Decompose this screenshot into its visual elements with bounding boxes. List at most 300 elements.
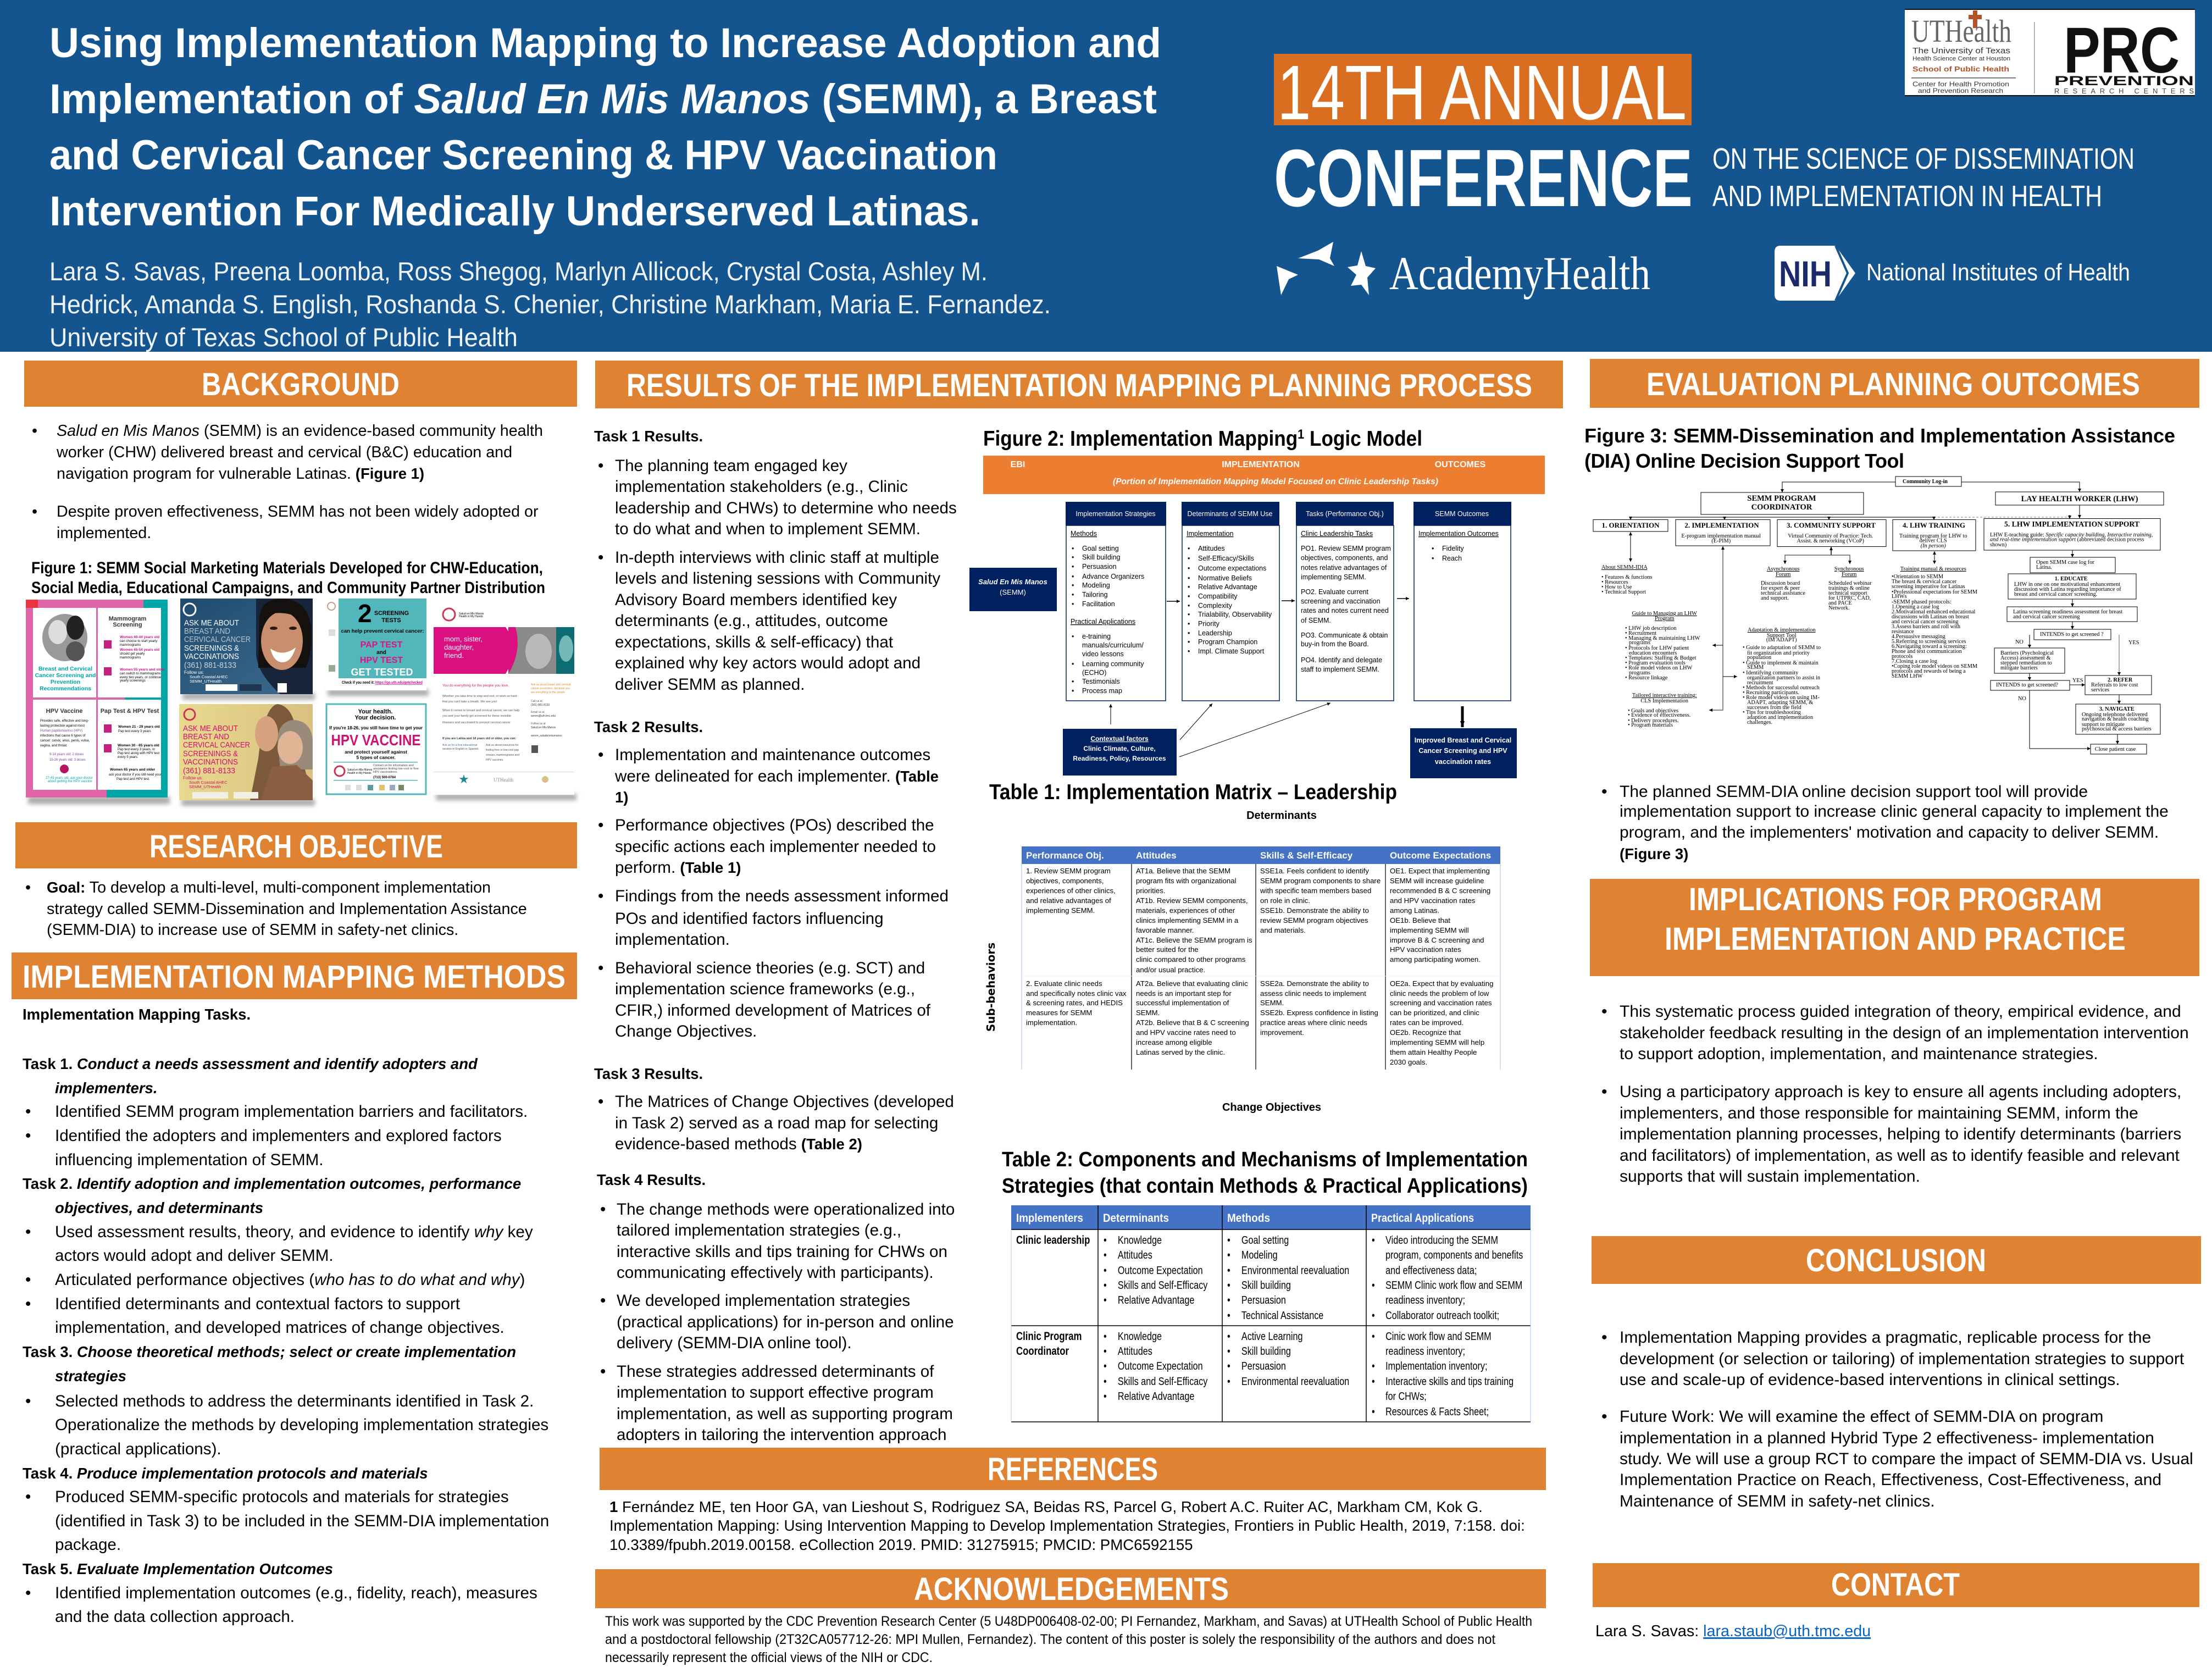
poster: mom sister daughter friend flyer: friend. bbox=[444, 651, 464, 660]
box headings: 5. LHW IMPLEMENTATION SUPPORT bbox=[2004, 520, 2139, 528]
poster: HPV vaccine: Your health. bbox=[358, 708, 392, 715]
table 1 axis label: determinants: Determinants bbox=[1246, 810, 1317, 822]
poster: mom sister daughter friend flyer: Call us at bbox=[531, 700, 542, 703]
poster: screening recommendations: every two years, or continue bbox=[120, 676, 162, 679]
poster title: Intervention For Medically Underserved Latinas. bbox=[49, 188, 980, 235]
poster: HPV vaccine bbox=[326, 704, 426, 794]
flowchart text: Program bbox=[1655, 616, 1674, 622]
figure 3: decision support flowchart: • Role model videos on using IM- bbox=[1743, 695, 1820, 701]
section header: research objective bbox=[15, 822, 577, 868]
poster: screening recommendations: can switch to mammograms bbox=[120, 672, 161, 675]
table 2: components and mechanisms: • bbox=[1227, 1234, 1230, 1246]
table 2: components and mechanisms: Resources & Facts Sheet; bbox=[1385, 1405, 1489, 1417]
logos: UTHealth and PRC: RESEARCH CENTERS bbox=[2054, 87, 2194, 95]
table 2: components and mechanisms: Clinic Program bbox=[1016, 1330, 1082, 1343]
figure 3: decision support flowchart bbox=[1593, 477, 2164, 754]
poster: screening recommendations: Pap test and HPV test. bbox=[117, 778, 150, 781]
section header: implications bbox=[1590, 879, 2199, 976]
background text: Salud en Mis Manos bbox=[57, 422, 199, 440]
table 2: components and mechanisms: • bbox=[1227, 1375, 1230, 1387]
table 1: implementation matrix: experiences of other clinics, bbox=[1026, 887, 1116, 895]
poster: screening recommendations: Women 65 years and older bbox=[110, 768, 156, 772]
table 1: implementation matrix: Latinas served by the clinic. bbox=[1136, 1048, 1225, 1056]
table 2: components and mechanisms: Skill building bbox=[1241, 1345, 1291, 1357]
poster: screening recommendations: HPV Vaccine bbox=[46, 708, 82, 715]
figure 3: decision support flowchart: 4.Persuasive messaging bbox=[1892, 634, 1945, 640]
table 1: implementation matrix: clinics implementing SEMM in a bbox=[1136, 916, 1239, 924]
section header: references bbox=[600, 1448, 1546, 1490]
table 1: implementation matrix: with specific team members based bbox=[1260, 887, 1371, 895]
flowchart text: Close patient case bbox=[2095, 746, 2136, 752]
figure 3: decision support flowchart: 6.Navigating toward a screening: bbox=[1892, 644, 1967, 650]
task results text: • bbox=[598, 549, 603, 567]
table 1: implementation matrix: AT1b. Review SEMM components, bbox=[1136, 896, 1248, 905]
table 1: implementation matrix: Outcome Expectations bbox=[1390, 850, 1491, 861]
task results text: (Table bbox=[895, 768, 939, 785]
table 2: components and mechanisms: • bbox=[1104, 1234, 1107, 1246]
poster: two screening tests: GET TESTED bbox=[351, 667, 413, 678]
flowchart text: Forum bbox=[1776, 572, 1790, 578]
conclusion text: study. We will use a group RCT to compare the impact of SEMM-DIA vs. Usual bbox=[1620, 1450, 2193, 1468]
column: determinants: Impl. Climate Support bbox=[1198, 647, 1265, 655]
table 2: components and mechanisms: Outcome Expectation bbox=[1118, 1264, 1203, 1276]
figure 3: decision support flowchart: • Program evaluation tools bbox=[1625, 660, 1686, 666]
task results text: leadership and CHWs) to determine who needs bbox=[615, 499, 957, 517]
figure 3: decision support flowchart: 7.Closing a case log bbox=[1892, 658, 1937, 664]
flowchart text: Support Tool bbox=[1767, 633, 1797, 639]
poster: screening recommendations: Screening bbox=[113, 622, 142, 628]
figure 3: decision support flowchart: and support. bbox=[1761, 595, 1789, 601]
poster: HPV vaccine: assistance finding low-cost or free bbox=[373, 767, 419, 771]
background text: (SEMM) is an evidence-based community health bbox=[199, 422, 543, 440]
table 1: implementation matrix: AT1a. Believe that the SEMM bbox=[1136, 867, 1230, 875]
flowchart text: (E-PIM) bbox=[1711, 538, 1731, 544]
task results text: were delineated for each implementer. bbox=[614, 767, 895, 785]
table 1: implementation matrix: recommended B & C screening bbox=[1390, 887, 1490, 895]
column: implementation strategies: • bbox=[1072, 573, 1074, 580]
table 2: components and mechanisms: • bbox=[1227, 1330, 1230, 1342]
poster title: Using Implementation Mapping to Increase Adoption and bbox=[49, 20, 1161, 67]
poster: screening recommendations bbox=[26, 600, 170, 804]
reference text: 10.3389/fpubh.2019.00158. eCollection 2019. PMID: 31275915; PMCID: PMC6592155 bbox=[609, 1536, 1193, 1553]
table 1: implementation matrix: materials, experiences of other bbox=[1136, 906, 1235, 915]
table 1: implementation matrix: HPV vaccination rates bbox=[1390, 945, 1461, 954]
poster: mom sister daughter friend flyer: Salud en Mis Manos bbox=[459, 612, 484, 616]
implementation mapping tasks: and the data collection approach. bbox=[55, 1608, 295, 1626]
conclusion text: implementation in a planned Hybrid Type 2 effectiveness- implementation bbox=[1620, 1429, 2154, 1447]
poster: mom sister daughter friend flyer: daughter, bbox=[444, 643, 474, 651]
implementation mapping tasks: • bbox=[25, 1295, 31, 1313]
figure 3: decision support flowchart: successes from the field bbox=[1747, 705, 1801, 711]
task results text: These strategies addressed determinants of bbox=[617, 1363, 934, 1381]
flowchart text: Synchronous bbox=[1834, 566, 1864, 572]
figure 3: decision support flowchart: for UTPRC, CAD, bbox=[1828, 595, 1871, 601]
figure 3: decision support flowchart: • LHW job description bbox=[1625, 625, 1676, 632]
table 2: components and mechanisms: Modeling bbox=[1241, 1249, 1278, 1261]
section header: evaluation planning outcomes bbox=[1590, 359, 2199, 408]
table 2: components and mechanisms: • bbox=[1227, 1279, 1230, 1291]
poster: mom sister daughter friend flyer bbox=[434, 599, 576, 800]
column: determinants: • bbox=[1188, 629, 1190, 637]
table 1: implementation matrix: SEMM. bbox=[1136, 1009, 1160, 1017]
column: implementation strategies: • bbox=[1072, 591, 1074, 599]
poster: screening recommendations: Women 30 - 65 years old bbox=[118, 744, 159, 747]
table 2: components and mechanisms: Skills and Self-Efficacy bbox=[1118, 1375, 1208, 1387]
poster: two screening tests: 2 bbox=[358, 599, 372, 628]
figure 3 heading: Figure 3: SEMM-Dissemination and Implementation Assistance bbox=[1584, 424, 2175, 447]
implementation mapping tasks: Selected methods to address the determinants identified in Task 2. bbox=[55, 1392, 534, 1410]
poster: two screening tests: SCREENING bbox=[374, 610, 409, 617]
box: contextual factors bbox=[1063, 729, 1177, 776]
column: determinants: • bbox=[1188, 574, 1190, 582]
reference text: Fernández ME, ten Hoor GA, van Lieshout S, Rodriguez SA, Beidas RS, Parcel G, Robert A.C. Ruiter AC, Markham CM, Kok G. bbox=[622, 1498, 1483, 1515]
figure 3: decision support flowchart: protocols bbox=[1892, 653, 1912, 660]
task results text: The Matrices of Change Objectives (developed bbox=[615, 1093, 954, 1111]
figure 3: decision support flowchart: (abbreviated decision process bbox=[2077, 536, 2144, 543]
box: EBI: (SEMM) bbox=[1000, 588, 1026, 596]
figure 3: decision support flowchart: Referrals to low cost bbox=[2091, 682, 2138, 688]
column: implementation strategies: e-training bbox=[1082, 633, 1111, 640]
flowchart text: Virtual Community of Practice: Tech. bbox=[1788, 533, 1873, 539]
poster: screening recommendations: lasting protection against most bbox=[40, 724, 85, 728]
implementation mapping tasks: Identify adoption and implementation outcomes, performance bbox=[77, 1175, 521, 1192]
poster: screening recommendations: Pap test every 3 years bbox=[118, 730, 151, 733]
table 1: implementation matrix: practice areas where clinic needs bbox=[1260, 1018, 1367, 1027]
task results text: implementation stakeholders (e.g., Clinic bbox=[615, 478, 908, 496]
implications text: implementation planning processes, helping to identify determinants (barriers bbox=[1620, 1125, 2181, 1143]
implementation mapping tasks: • bbox=[25, 1103, 31, 1121]
figure 3: decision support flowchart: programs bbox=[1629, 670, 1650, 676]
flowchart text: (In person) bbox=[1921, 543, 1946, 549]
table 2: components and mechanisms: Knowledge bbox=[1118, 1234, 1162, 1246]
poster: screening recommendations: can choose to start yearly bbox=[120, 640, 157, 643]
poster: screening recommendations: mammograms bbox=[120, 656, 141, 660]
table 2: components and mechanisms: Knowledge bbox=[1118, 1330, 1162, 1342]
table 1: implementation matrix: priorities. bbox=[1136, 887, 1165, 895]
figure 3 heading: (DIA) Online Decision Support Tool bbox=[1584, 450, 1904, 472]
logos: UTHealth and PRC bbox=[1905, 9, 2195, 96]
table 2: components and mechanisms: Attitudes bbox=[1118, 1345, 1152, 1357]
poster: HPV vaccine: Contact us for information and bbox=[373, 764, 414, 767]
figure 3: decision support flowchart: organization partners to assist in bbox=[1747, 675, 1820, 681]
poster title: Implementation of Salud En Mis Manos (SEMM), a Breast bbox=[49, 76, 1157, 123]
poster: screening recommendations: about getting the HPV vaccine bbox=[48, 780, 92, 783]
task results text: implementation. bbox=[615, 931, 730, 949]
implementation mapping tasks: • bbox=[25, 1488, 31, 1506]
implementation mapping tasks: Identified determinants and contextual factors to support bbox=[55, 1295, 460, 1313]
figure 3: decision support flowchart: Latina. bbox=[2036, 564, 2052, 571]
implementation mapping tasks: Identified SEMM program implementation barriers and facilitators. bbox=[55, 1103, 528, 1121]
implementation mapping tasks: (identified in Task 3) to be included in the SEMM-DIA implementation bbox=[55, 1512, 549, 1530]
implementation mapping tasks: • bbox=[25, 1271, 31, 1289]
table 1: implementation matrix: and HPV vaccination rates bbox=[1390, 896, 1476, 905]
poster: mom sister daughter friend flyer: HPV vaccines. bbox=[486, 758, 504, 762]
table 2: components and mechanisms: • bbox=[1104, 1249, 1107, 1261]
task results text: expectations, skills & self-efficacy) that bbox=[615, 633, 893, 651]
column: implementation strategies: Advance Organizers bbox=[1082, 573, 1144, 580]
poster: HPV vaccine: HPV vaccinations. bbox=[373, 771, 398, 774]
poster: mom sister daughter friend flyer: you and your family get screened for these invisible bbox=[442, 715, 511, 718]
logo: NIH: National Institutes of Health bbox=[1866, 259, 2130, 286]
arrows bbox=[1111, 599, 1462, 757]
figure 3: decision support flowchart: Ongoing telephone delivered bbox=[2082, 712, 2148, 718]
poster: mom sister daughter friend flyer: UTHealth bbox=[494, 777, 513, 783]
column: implementation strategies: manuals/curriculum/ bbox=[1082, 641, 1144, 649]
box: improved screening bbox=[1410, 728, 1517, 778]
column: tasks: Tasks (Performance Obj.) bbox=[1306, 510, 1384, 518]
task results text: in Task 2) served as a road map for selecting bbox=[615, 1114, 938, 1132]
table 2: components and mechanisms: Cinic work flow and SEMM bbox=[1385, 1330, 1492, 1342]
implementation mapping tasks: • bbox=[25, 1392, 31, 1410]
figure 3: decision support flowchart: LHW in one on one motivational enhancement bbox=[2014, 581, 2120, 588]
flowchart text: Training program for LHW to bbox=[1899, 533, 1967, 539]
column: implementation strategies bbox=[1066, 502, 1166, 701]
figure 3: decision support flowchart: services bbox=[2091, 687, 2109, 693]
figure 3: decision support flowchart: and cervical cancer screening bbox=[1892, 619, 1958, 625]
figure 3: decision support flowchart: technical support bbox=[1828, 590, 1867, 596]
task results text: Task 3 Results. bbox=[594, 1065, 703, 1082]
table 2: components and mechanisms: Relative Advantage bbox=[1118, 1390, 1194, 1402]
box headings: LAY HEALTH WORKER (LHW) bbox=[2021, 495, 2138, 503]
background text: navigation program for vulnerable Latinas. bbox=[57, 465, 356, 483]
poster: mom sister daughter friend flyer: Ask us for a free educational bbox=[442, 744, 477, 747]
figure 3: decision support flowchart: • Technical Support bbox=[1601, 589, 1646, 595]
conference banner: AND IMPLEMENTATION IN HEALTH bbox=[1712, 180, 2102, 213]
logos: UTHealth and PRC: Center for Health Promotion bbox=[1912, 80, 2009, 88]
logic model band: EBI bbox=[1011, 460, 1025, 469]
poster: ask me about (tan) bbox=[179, 704, 315, 806]
table 2: components and mechanisms bbox=[1011, 1205, 1531, 1422]
figure 3: decision support flowchart: INTENDS to get screened? bbox=[1996, 682, 2058, 688]
table 1: implementation matrix: SSE1a. Feels confident to identify bbox=[1260, 867, 1369, 875]
task results text: to do what and when to implement SEMM. bbox=[615, 520, 921, 538]
poster: ask me about (tan): SCREENINGS & bbox=[183, 749, 238, 758]
column: determinants: Leadership bbox=[1198, 629, 1232, 637]
logos: UTHealth and PRC: and Prevention Research bbox=[1918, 87, 2003, 95]
header band bbox=[0, 0, 2212, 352]
boxes bbox=[1593, 477, 2164, 754]
task results text: determinants (e.g., attitudes, outcome bbox=[615, 612, 888, 630]
figure 3: decision support flowchart: Latina screening readiness assessment for breast bbox=[2013, 609, 2122, 615]
poster: screening recommendations: vagina, and throat. bbox=[40, 744, 68, 747]
section header: results bbox=[595, 361, 1563, 408]
task results text: Findings from the needs assessment informed bbox=[615, 887, 949, 905]
background text: (Figure 1) bbox=[356, 465, 424, 482]
poster: screening recommendations: 15-26 years old: 3 doses bbox=[49, 758, 86, 762]
poster: ask me about (tan): BREAST AND bbox=[183, 732, 229, 741]
figure 2 heading: Figure 2: Implementation Mapping1 Logic Model bbox=[983, 427, 1422, 451]
poster: screening recommendations: Mammogram bbox=[109, 616, 146, 622]
table 1: implementation matrix: 2. Evaluate clinic needs bbox=[1026, 979, 1102, 988]
table 1: implementation matrix: & screening rates, and HEDIS bbox=[1026, 999, 1123, 1007]
figure 3: decision support flowchart: Open SEMM case log for bbox=[2036, 560, 2094, 566]
figure 3 heading bbox=[1584, 424, 2175, 472]
authors and affiliation: Hedrick, Amanda S. English, Roshanda S. Chenier, Christine Markham, Maria E. Fernandez. bbox=[49, 290, 1051, 319]
figure 3: decision support flowchart: INTENDS to get screened ? bbox=[2040, 632, 2104, 638]
implementation mapping tasks: actors would adopt and deliver SEMM. bbox=[55, 1247, 334, 1265]
poster: screening recommendations: 9-14 years old: 2 doses bbox=[49, 753, 84, 756]
figure 1 caption: Social Media, Educational Campaigns, and Community Partner Distribution bbox=[31, 579, 545, 597]
task results text: The change methods were operationalized into bbox=[617, 1200, 955, 1219]
poster: mom sister daughter friend flyer: ★ bbox=[458, 772, 469, 786]
implications text: to support adoption, implementation, and maintenance strategies. bbox=[1620, 1045, 2098, 1063]
poster: screening recommendations: every 5 years. bbox=[118, 756, 138, 759]
column: implementation strategies: Practical Applications bbox=[1071, 618, 1135, 625]
figure 3: decision support flowchart: • Goals and objectives bbox=[1628, 708, 1678, 714]
figure 3: decision support flowchart: protocols and rewards of being a bbox=[1892, 668, 1966, 674]
poster: ask me about (blue) bbox=[180, 599, 315, 700]
column: tasks: PO3. Communicate & obtain bbox=[1301, 632, 1388, 639]
poster: screening recommendations: Breast and Cervical bbox=[38, 666, 92, 672]
poster: mom sister daughter friend flyer: Whether you take time to stop and rest, or work so hard bbox=[442, 695, 517, 698]
column: implementation strategies: • bbox=[1072, 633, 1074, 640]
task results text: Implementation and maintenance outcomes bbox=[615, 746, 930, 764]
implementation mapping tasks: who has to do what and why) bbox=[314, 1271, 525, 1289]
task results text: We developed implementation strategies bbox=[617, 1292, 910, 1310]
column: determinants: • bbox=[1188, 602, 1190, 610]
table 2: components and mechanisms: • bbox=[1104, 1375, 1107, 1387]
task results text: • bbox=[598, 816, 603, 834]
logos: UTHealth and PRC: UTHealth bbox=[1911, 13, 2011, 49]
table 1 axis label: sub-behaviors: Sub-behaviors bbox=[984, 943, 997, 1032]
column: determinants: • bbox=[1188, 638, 1190, 646]
column: implementation strategies: Implementation Strategies bbox=[1075, 510, 1156, 518]
logos: UTHealth and PRC: PRC bbox=[2064, 14, 2180, 87]
poster: ask me about (tan): SEMM_UTHealth bbox=[189, 784, 221, 789]
column: determinants: • bbox=[1188, 592, 1190, 600]
table 1: implementation matrix: Skills & Self-Efficacy bbox=[1260, 850, 1353, 861]
table 1: implementation matrix: can be prioritized, and clinic bbox=[1390, 1009, 1479, 1017]
table 1: implementation matrix: SSE1b. Demonstrate the ability to bbox=[1260, 906, 1369, 915]
evaluation planning text: The planned SEMM-DIA online decision support tool will provide bbox=[1620, 783, 2088, 801]
evaluation planning text: implementation support to increase clinic general capacity to implement the bbox=[1620, 802, 2169, 821]
box: contextual factors: Readiness, Policy, Resources bbox=[1073, 755, 1166, 762]
figure 3: decision support flowchart: • Evidence of effectiveness. bbox=[1628, 712, 1690, 718]
column: tasks: PO1. Review SEMM program bbox=[1301, 545, 1391, 552]
figure 3: decision support flowchart: breast and cervical cancer screening. bbox=[2014, 591, 2097, 597]
poster: screening recommendations: cancer: cervix, anus, penis, vulva, bbox=[40, 739, 90, 743]
table 2: components and mechanisms: Attitudes bbox=[1118, 1249, 1152, 1261]
flowchart text: Adaptation & implementation bbox=[1748, 627, 1815, 633]
figure 3: decision support flowchart: • Guide to implement & maintain bbox=[1743, 660, 1819, 666]
table 1: implementation matrix: Performance Obj. bbox=[1026, 850, 1104, 861]
figure 3: decision support flowchart: •Orientation to SEMM bbox=[1892, 574, 1943, 580]
research objective text: Goal: bbox=[47, 879, 85, 896]
table 2: components and mechanisms: Determinants bbox=[1103, 1212, 1169, 1225]
table 1: implementation matrix: Attitudes bbox=[1136, 850, 1177, 861]
background text: • bbox=[32, 422, 37, 440]
box headings: SEMM PROGRAM bbox=[1747, 494, 1816, 503]
box headings: 2. IMPLEMENTATION bbox=[1684, 521, 1759, 529]
conclusion text: Future Work: We will examine the effect of SEMM-DIA on program bbox=[1620, 1408, 2103, 1426]
column: determinants: Program Champion bbox=[1198, 638, 1257, 646]
figure 3: decision support flowchart: 5.Referring to screening services bbox=[1892, 639, 1966, 645]
implementation mapping tasks: • bbox=[25, 1584, 31, 1602]
table 1: implementation matrix: favorable manner. bbox=[1136, 926, 1194, 934]
column: tasks: rates and notes current need bbox=[1301, 607, 1389, 614]
implementation mapping tasks: objectives, and determinants bbox=[55, 1199, 263, 1216]
logos: UTHealth and PRC: The University of Texas bbox=[1912, 46, 2010, 56]
implementation mapping tasks: Produced SEMM-specific protocols and materials for strategies bbox=[55, 1488, 509, 1506]
logic model band bbox=[983, 456, 1545, 494]
table 2: components and mechanisms: Coordinator bbox=[1016, 1345, 1069, 1358]
section header: conclusion bbox=[1592, 1236, 2201, 1284]
table 2: components and mechanisms: Collaborator outreach toolkit; bbox=[1385, 1309, 1499, 1321]
column: implementation strategies: Testimonials bbox=[1082, 678, 1120, 685]
column: tasks bbox=[1296, 502, 1394, 701]
implementation mapping tasks: implementers. bbox=[55, 1079, 157, 1096]
table 1: implementation matrix bbox=[1022, 846, 1500, 1070]
implementation mapping tasks: Identified implementation outcomes (e.g., fidelity, reach), measures bbox=[55, 1584, 537, 1602]
poster: screening recommendations: Provides safe, effective and long- bbox=[40, 719, 89, 723]
column: tasks: objectives, components, and bbox=[1301, 554, 1388, 562]
implementation mapping tasks: Choose theoretical methods; select or create implementation bbox=[77, 1343, 516, 1360]
figure 3: decision support flowchart: and real-time implementation support bbox=[1990, 536, 2077, 543]
table 1: implementation matrix: among participating women. bbox=[1390, 955, 1481, 963]
poster: ask me about (blue): BREAST AND bbox=[184, 627, 230, 636]
poster: screening recommendations: Pap test every 3 years, or bbox=[118, 748, 155, 751]
table 1: implementation matrix: OE2a. Expect that by evaluating bbox=[1390, 979, 1493, 988]
figure 3: decision support flowchart: • Recruiting participants. bbox=[1743, 690, 1799, 696]
conclusion text: • bbox=[1601, 1328, 1607, 1347]
poster: screening recommendations: Women 55 years and older bbox=[120, 668, 165, 672]
section header: acknowledgements: ACKNOWLEDGEMENTS bbox=[914, 1571, 1229, 1607]
table 2: components and mechanisms: • bbox=[1104, 1330, 1107, 1342]
section header: implications: IMPLEMENTATION AND PRACTICE bbox=[1665, 921, 2126, 957]
table 2: components and mechanisms: • bbox=[1227, 1309, 1230, 1321]
task results text: POs and identified factors influencing bbox=[615, 910, 884, 928]
poster: ask me about (blue): CERVICAL CANCER bbox=[184, 635, 251, 644]
column: determinants: • bbox=[1188, 545, 1190, 552]
table 1: implementation matrix: AT1c. Believe the SEMM program is bbox=[1136, 936, 1252, 944]
table 1: implementation matrix: 2030 goals. bbox=[1390, 1058, 1427, 1066]
section header: contact: CONTACT bbox=[1831, 1567, 1960, 1603]
task results text: CFIR,) informed development of Matrices of bbox=[615, 1001, 931, 1020]
table 1: implementation matrix: better suited for the bbox=[1136, 945, 1199, 954]
table 2: components and mechanisms: • bbox=[1227, 1249, 1230, 1261]
conclusion text: development (or selection or tailoring) of implementation strategies to support bbox=[1620, 1350, 2185, 1368]
table 2: components and mechanisms: Skills and Self-Efficacy bbox=[1118, 1279, 1208, 1291]
box headings: Community Log-in bbox=[1903, 479, 1948, 485]
flowchart text: 1. EDUCATE bbox=[2055, 576, 2088, 582]
task results text: • bbox=[598, 1093, 603, 1111]
table 2 heading: Strategies (that contain Methods & Practical Applications) bbox=[1002, 1175, 1528, 1198]
poster: screening recommendations: Women 45-54 years old bbox=[120, 648, 159, 652]
figure 3: decision support flowchart: • Delivery procedures. bbox=[1628, 718, 1679, 724]
column: implementation strategies: (ECHO) bbox=[1082, 669, 1106, 677]
column: determinants: • bbox=[1188, 583, 1190, 591]
task results text: • bbox=[598, 887, 603, 905]
figure 3: decision support flowchart: trainings & online bbox=[1828, 585, 1870, 591]
implementation mapping tasks: package. bbox=[55, 1536, 121, 1554]
flowchart text: Forum bbox=[1842, 572, 1856, 578]
acknowledgements text: and a postdoctoral fellowship (2T32CA057712-26: MPI Mullen, Fernandez). The content of this poster is solely the responsibility of the authors and does not bbox=[605, 1632, 1495, 1647]
poster: two screening tests bbox=[325, 599, 429, 696]
logo: AcademyHealth bbox=[1277, 242, 1650, 300]
table 2: components and mechanisms: • bbox=[1372, 1279, 1375, 1291]
figure 3: decision support flowchart: navigation & health coaching bbox=[2082, 716, 2149, 722]
table 2: components and mechanisms: • bbox=[1372, 1375, 1375, 1387]
poster: ask me about (blue): SCREENINGS & bbox=[184, 644, 239, 653]
background text: • bbox=[32, 503, 37, 520]
acknowledgements text bbox=[605, 1614, 1532, 1665]
column: tasks: Clinic Leadership Tasks bbox=[1301, 530, 1373, 538]
flowchart text: Guide to Managing an LHW bbox=[1632, 611, 1697, 617]
table 1: implementation matrix: objectives, components, bbox=[1026, 877, 1104, 885]
research objective text: • bbox=[25, 879, 31, 896]
table 2: components and mechanisms: • bbox=[1372, 1309, 1375, 1321]
contact text: Lara S. Savas: lara.staub@uth.tmc.edu bbox=[1595, 1622, 1871, 1640]
